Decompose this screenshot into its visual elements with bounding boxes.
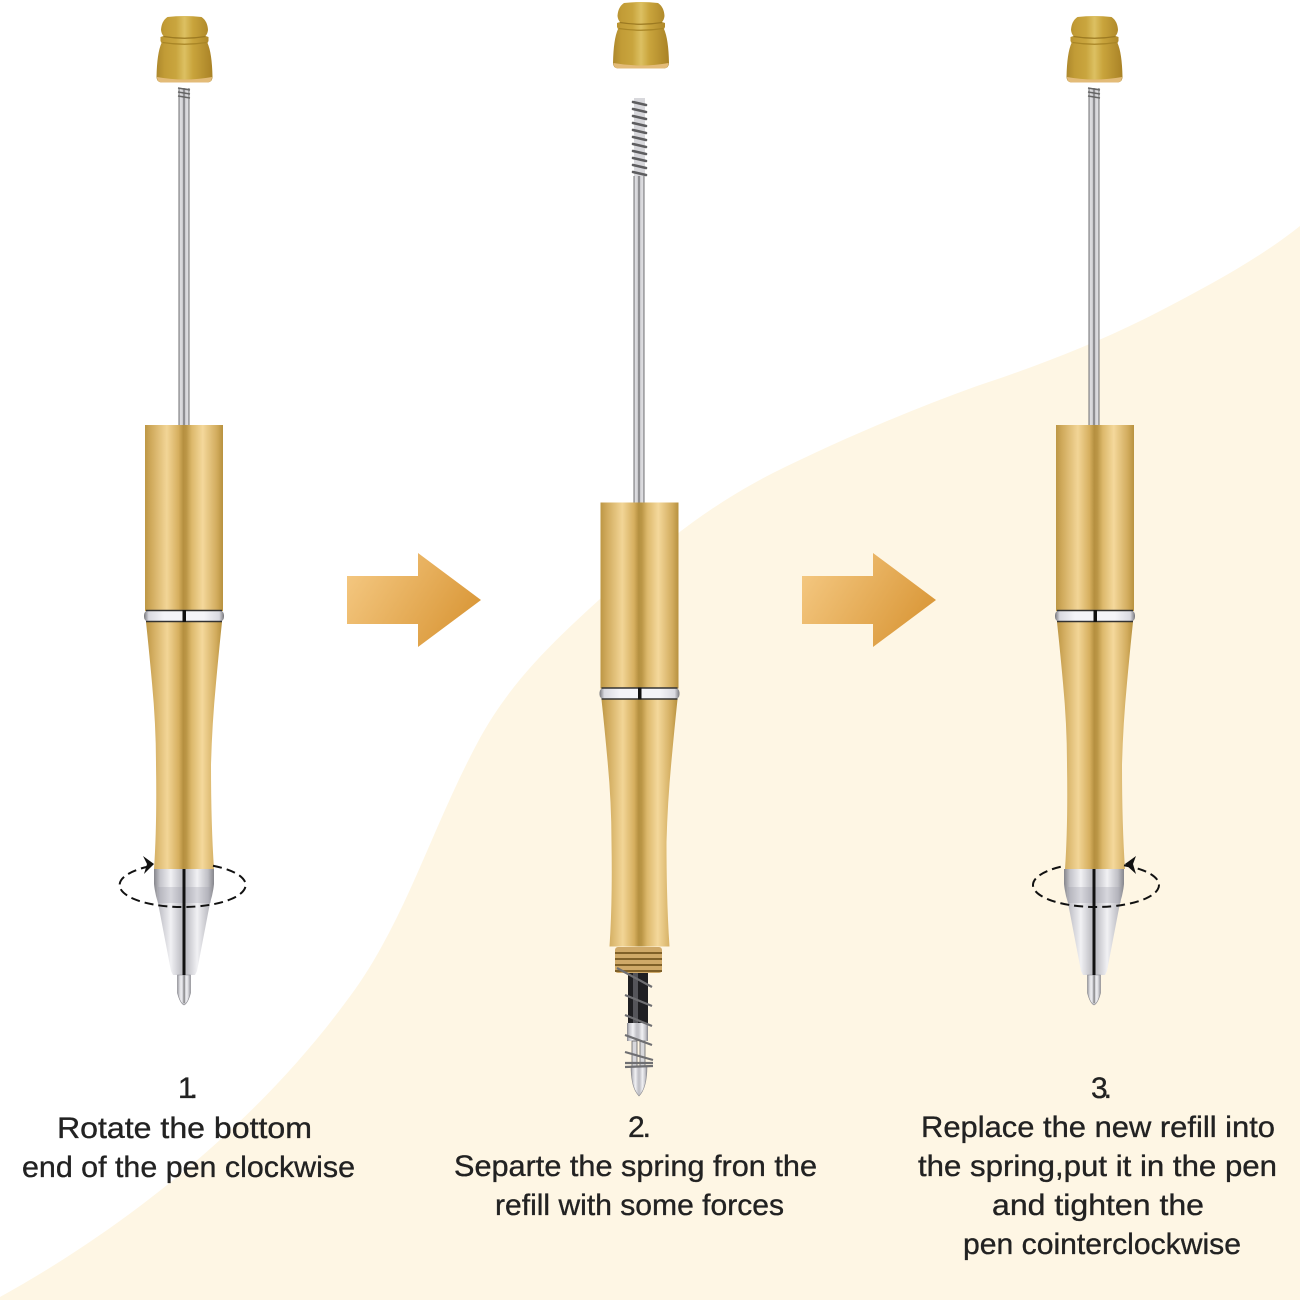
step 2 caption: refill with some forces — [495, 1189, 784, 1222]
step 1 caption: Rotate the bottom — [57, 1112, 312, 1145]
metal tip — [1064, 869, 1124, 1005]
pen 1 — [120, 16, 246, 1005]
arrow 1 — [347, 553, 481, 647]
barrel — [1055, 425, 1135, 869]
bead cap — [613, 2, 669, 68]
step 1 caption: 1. — [178, 1072, 198, 1105]
refill rod — [178, 88, 190, 426]
step 2 caption — [454, 1111, 817, 1222]
refill rod — [1088, 88, 1100, 426]
step 3 caption: and tighten the — [992, 1189, 1204, 1222]
bead cap — [1066, 16, 1122, 82]
rotation arrow clockwise — [120, 856, 246, 907]
refill rod — [634, 176, 644, 504]
rotation arrow counterclockwise — [1033, 856, 1159, 907]
step 1 caption — [22, 1072, 355, 1184]
bead cap — [156, 16, 212, 82]
pen 3 — [1033, 16, 1159, 1005]
step 3 caption: 3. — [1091, 1072, 1112, 1105]
step 3 caption: Replace the new refill into — [921, 1111, 1275, 1144]
arrow 2 — [802, 553, 936, 647]
ink refill — [627, 973, 648, 1096]
spring — [617, 968, 653, 1067]
step 1 caption: end of the pen clockwise — [22, 1151, 355, 1184]
step 3 caption: the spring,put it in the pen — [918, 1150, 1277, 1183]
step 3 caption: pen cointerclockwise — [963, 1228, 1241, 1261]
barrel — [600, 502, 680, 946]
spring top — [633, 98, 646, 176]
step 2 caption: 2. — [628, 1111, 651, 1144]
barrel — [144, 425, 224, 869]
step 3 caption — [918, 1072, 1277, 1261]
metal tip — [154, 869, 214, 1005]
step 2 caption: Separte the spring fron the — [454, 1150, 817, 1183]
threaded end — [615, 947, 662, 973]
pen 2 — [600, 2, 680, 1096]
